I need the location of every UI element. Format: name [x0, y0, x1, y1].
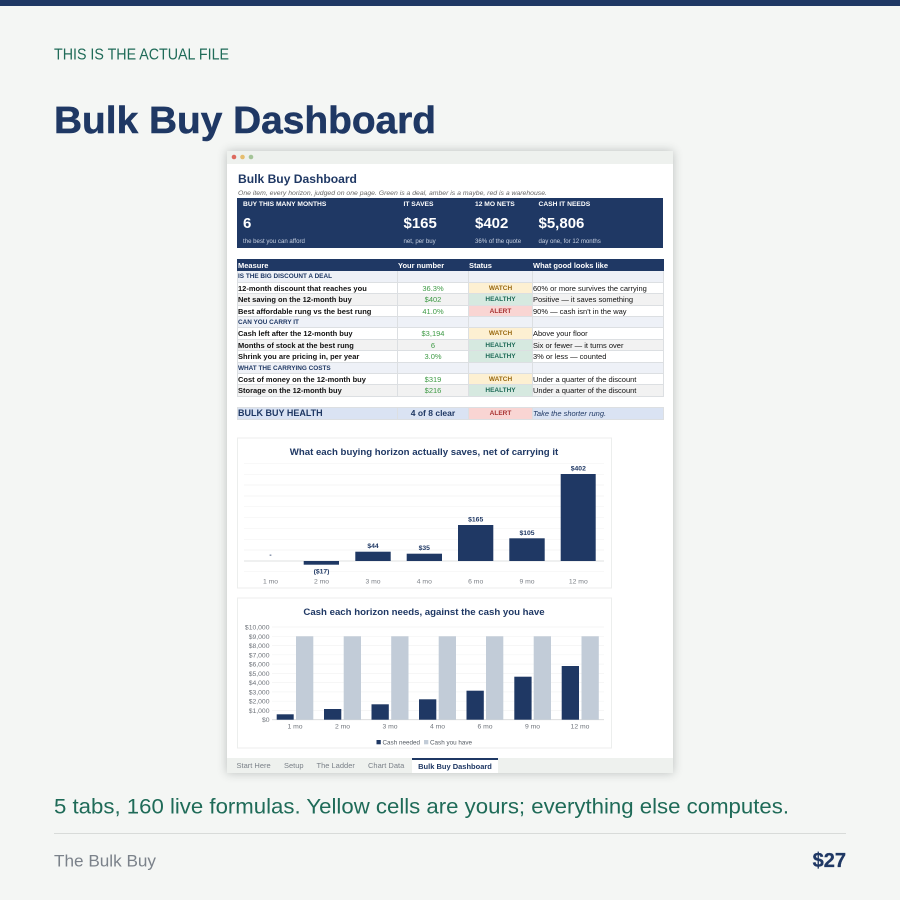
measures table: Best affordable rung vs the best rung [238, 307, 371, 316]
chart: cash needed vs cash available: $8,000 [249, 643, 270, 650]
health summary row: BULK BUY HEALTH [238, 408, 323, 418]
measures table: Six or fewer — it turns over [533, 341, 623, 350]
chart: cash needed vs cash available: 9 mo [525, 724, 540, 730]
chart: cash needed vs cash available: $10,000 [245, 624, 270, 632]
top accent bar [0, 0, 900, 6]
measures table: Above your floor [533, 329, 588, 338]
chart: cash needed vs cash available: $5,000 [249, 671, 270, 678]
panel: KPI banner: net, per buy [404, 238, 436, 244]
footer brand: The Bulk Buy [54, 852, 156, 871]
chart: net savings by horizon: 9 mo [519, 578, 535, 586]
measures table: ALERT [490, 308, 511, 315]
measures table: $3,194 [422, 329, 444, 338]
sheet tabs: Setup [284, 761, 304, 770]
sheet tabs [227, 758, 673, 773]
measures table: WATCH [489, 376, 512, 383]
window title bar [227, 151, 673, 164]
measures table: Measure [238, 261, 268, 270]
chart: cash needed vs cash available: Cash you have [430, 740, 473, 747]
measures table: WHAT THE CARRYING COSTS [238, 365, 331, 372]
health summary row [237, 407, 664, 420]
sheet tabs: Chart Data [368, 761, 404, 770]
chart: cash needed vs cash available: 3 mo [382, 724, 398, 730]
sheet tabs: Start Here [236, 761, 271, 770]
panel: KPI banner: $402 [475, 215, 508, 232]
panel: KPI banner: $165 [404, 215, 437, 232]
chart: cash needed vs cash available: 2 mo [335, 724, 350, 730]
chart: cash needed vs cash available: $3,000 [249, 689, 270, 696]
chart: cash needed vs cash available: 4 mo [430, 724, 445, 730]
measures table: 3.0% [424, 352, 442, 361]
chart: net savings by horizon: 2 mo [314, 578, 329, 586]
measures table: HEALTHY [485, 342, 516, 349]
active tab [412, 758, 498, 773]
active tab: Bulk Buy Dashboard [418, 762, 492, 771]
sheet tabs: The Ladder [316, 761, 355, 770]
chart: net savings by horizon: $35 [419, 545, 430, 552]
measures table [237, 259, 664, 397]
panel: KPI banner: BUY THIS MANY MONTHS [243, 201, 326, 208]
measures table: $319 [425, 375, 441, 384]
measures table: What good looks like [533, 261, 608, 270]
chart: cash needed vs cash available: 12 mo [571, 724, 590, 730]
measures table: 41.0% [422, 307, 444, 316]
panel: KPI banner [237, 198, 663, 248]
chart: cash needed vs cash available: $6,000 [249, 662, 270, 669]
eyebrow label: THIS IS THE ACTUAL FILE [54, 46, 229, 64]
chart: cash needed vs cash available: $2,000 [249, 699, 270, 706]
measures table: Cost of money on the 12-month buy [238, 375, 366, 384]
panel: KPI banner: day one, for 12 months [538, 238, 601, 244]
measures table: Net saving on the 12-month buy [238, 295, 352, 304]
measures table: WATCH [489, 330, 512, 337]
chart: cash needed vs cash available: Cash each horizon needs, against the cash you have [303, 607, 545, 618]
chart: cash needed vs cash available: 1 mo [287, 724, 303, 730]
measures table: HEALTHY [485, 387, 516, 394]
price: $27 [813, 850, 846, 872]
chart: net savings by horizon: 6 mo [468, 578, 483, 586]
icon: window buttons [232, 154, 254, 160]
chart: net savings by horizon: 4 mo [417, 578, 432, 586]
panel: KPI banner: $5,806 [538, 215, 584, 232]
measures table: 60% or more survives the carrying [533, 284, 647, 293]
title: Bulk Buy Dashboard [54, 100, 436, 142]
chart: net savings by horizon: 3 mo [365, 578, 381, 586]
measures table: HEALTHY [485, 353, 516, 360]
chart: cash needed vs cash available: $1,000 [249, 708, 270, 715]
measures table: IS THE BIG DISCOUNT A DEAL [238, 273, 332, 280]
chart: net savings by horizon: ($17) [314, 568, 329, 576]
sheet subtitle: One item, every horizon, judged on one page. Green is a deal, amber is a maybe, red is a warehouse. [238, 190, 547, 197]
measures table: Your number [398, 261, 444, 270]
chart: net savings by horizon: $105 [519, 530, 535, 537]
chart: cash needed vs cash available: $7,000 [249, 652, 270, 659]
measures table: Under a quarter of the discount [533, 375, 636, 384]
panel: spreadsheet window [227, 151, 673, 773]
chart: net savings by horizon: $44 [367, 543, 379, 550]
chart: net savings by horizon: What each buying horizon actually saves, net of carrying it [290, 447, 559, 458]
health summary row: 4 of 8 clear [411, 408, 455, 418]
chart: cash needed vs cash available: $0 [262, 717, 270, 724]
measures table: Shrink you are pricing in, per year [238, 352, 359, 361]
chart: net savings by horizon: - [269, 552, 272, 559]
measures table: Status [469, 261, 492, 270]
panel: KPI banner: the best you can afford [243, 238, 305, 244]
measures table: Positive — it saves something [533, 295, 633, 304]
measures table: 90% — cash isn't in the way [533, 307, 627, 316]
chart: net savings by horizon: 1 mo [263, 578, 278, 586]
caption: 5 tabs, 160 live formulas. Yellow cells are yours; everything else computes. [54, 794, 789, 818]
measures table: 36.3% [422, 284, 444, 293]
measures table: Months of stock at the best rung [238, 341, 354, 350]
measures table: Cash left after the 12-month buy [238, 329, 353, 338]
panel: KPI banner: 36% of the quote [475, 238, 521, 244]
measures table: $216 [425, 386, 441, 395]
health summary row: Take the shorter rung. [533, 409, 606, 418]
chart: net savings by horizon: 12 mo [569, 578, 588, 586]
footer divider [54, 832, 846, 834]
health summary row: ALERT [490, 410, 511, 417]
chart: cash needed vs cash available: 6 mo [477, 724, 493, 730]
panel: KPI banner: 6 [243, 215, 251, 232]
measures table: HEALTHY [485, 296, 516, 303]
measures table: WATCH [489, 285, 512, 292]
sheet heading: Bulk Buy Dashboard [238, 172, 357, 186]
measures table: $402 [425, 295, 441, 304]
chart: net savings by horizon: $165 [468, 516, 483, 524]
measures table: 3% or less — counted [533, 352, 606, 361]
measures table: 6 [431, 341, 435, 350]
chart: cash needed vs cash available: Cash needed [382, 740, 420, 747]
measures table: CAN YOU CARRY IT [238, 319, 299, 326]
measures table: Storage on the 12-month buy [238, 386, 342, 395]
chart: cash needed vs cash available: $4,000 [249, 680, 270, 687]
panel: KPI banner: 12 MO NETS [475, 201, 515, 208]
panel: KPI banner: IT SAVES [404, 201, 433, 208]
measures table: Under a quarter of the discount [533, 386, 636, 395]
chart: cash needed vs cash available: $9,000 [249, 634, 270, 641]
panel: KPI banner: CASH IT NEEDS [538, 201, 590, 208]
measures table: 12-month discount that reaches you [238, 284, 367, 293]
chart: net savings by horizon: $402 [571, 466, 586, 472]
